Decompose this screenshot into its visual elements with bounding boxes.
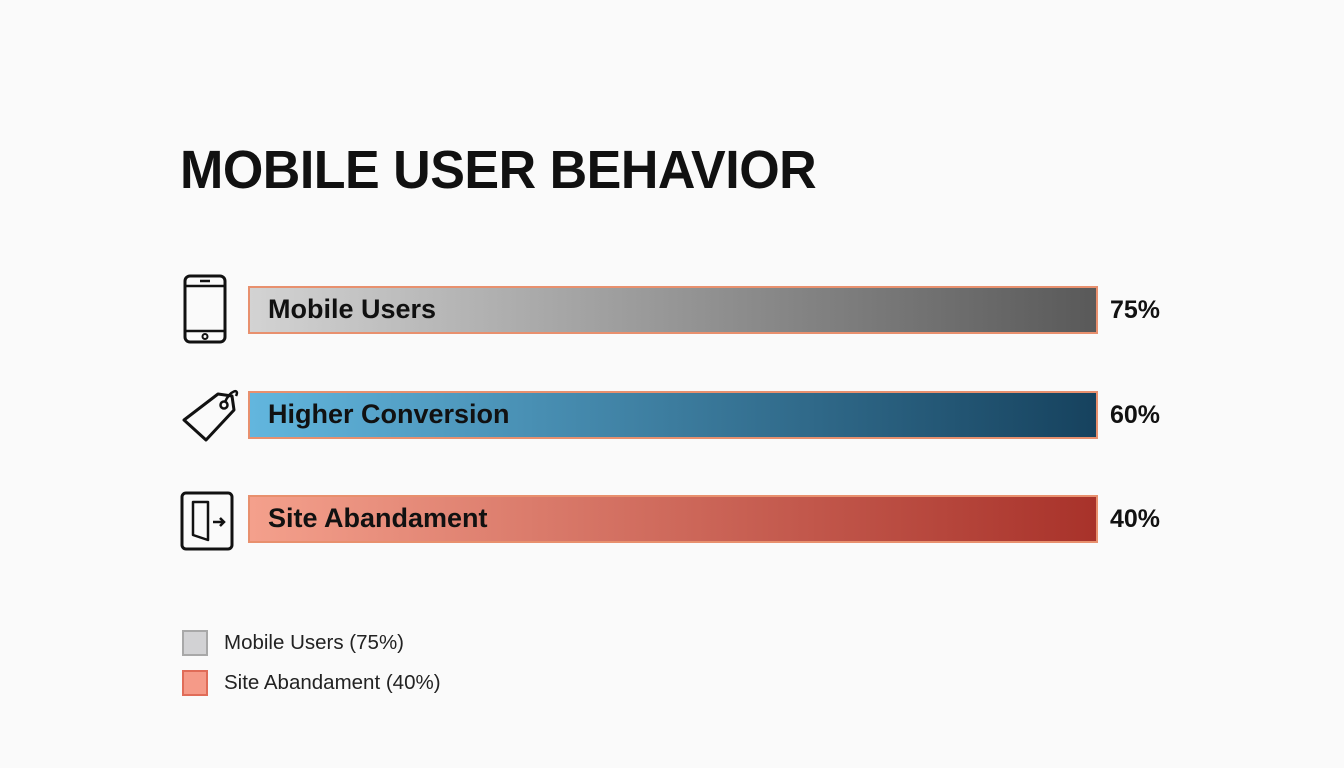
value: 40%: 40% <box>1110 505 1160 533</box>
bar: mobile users <box>248 286 1098 334</box>
legend text: site abandament: Site Abandament (40%) <box>224 671 441 694</box>
bar: site abandament: Site Abandament <box>268 503 488 533</box>
bar: higher conversion <box>248 391 1098 439</box>
icon: phone <box>184 274 226 344</box>
bar: higher conversion: Higher Conversion <box>268 399 510 429</box>
value: 75%: 75% <box>1110 296 1160 324</box>
legend text: mobile users: Mobile Users (75%) <box>224 631 404 654</box>
title: MOBILE USER BEHAVIOR <box>180 140 816 200</box>
icon: tag <box>182 390 238 442</box>
bar: mobile users: Mobile Users <box>268 294 436 324</box>
legend swatch: site abandament <box>182 670 208 696</box>
icon: exit door <box>180 492 234 550</box>
bar: site abandament <box>248 495 1098 543</box>
legend swatch: mobile users <box>182 630 208 656</box>
legend <box>182 630 441 696</box>
value: 60%: 60% <box>1110 401 1160 429</box>
